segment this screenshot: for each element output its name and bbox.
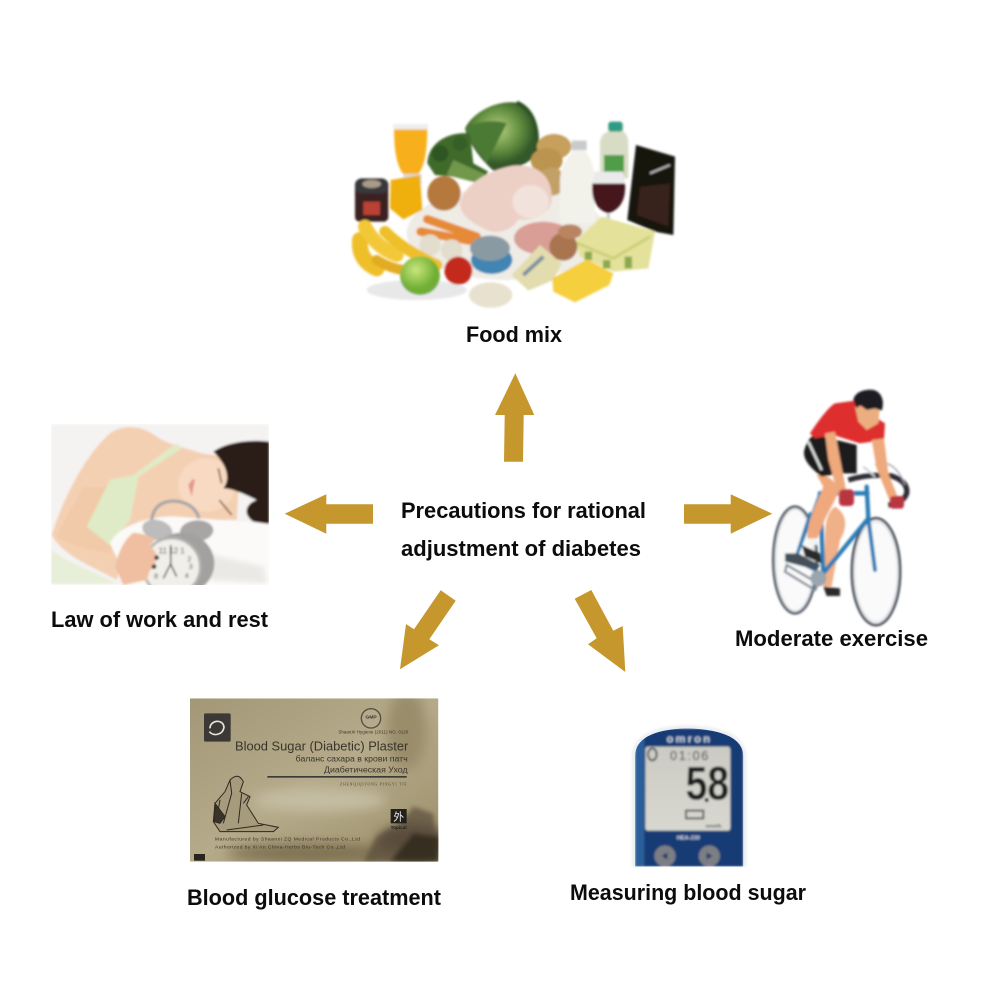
front wheel (852, 518, 900, 625)
yellow cheese (552, 259, 613, 302)
blue cheese (512, 245, 562, 291)
label: Moderate exercise: Moderate exercise (735, 626, 928, 651)
shadow (367, 280, 467, 300)
sleeping woman photo (51, 424, 270, 595)
saddle and handlebar (848, 463, 907, 505)
face (855, 405, 880, 430)
hair (853, 390, 883, 411)
black bag (627, 145, 675, 235)
glucose meter (632, 725, 747, 867)
far leg (823, 507, 845, 587)
stamp (361, 709, 381, 728)
approval number: ShaanXi Hygiene (2011) NO. 0120 (338, 729, 409, 734)
left button (654, 845, 676, 867)
rear wheel (773, 507, 817, 613)
wine glass (592, 172, 625, 222)
yogurts (575, 217, 655, 272)
mushrooms (419, 234, 462, 261)
ink mountains (363, 807, 438, 862)
milk bottle (560, 141, 595, 223)
right button (699, 845, 720, 867)
label: Food mix: Food mix (466, 322, 563, 347)
russian line 1: баланс сахара в крови патч (296, 754, 408, 764)
bike frame (795, 487, 875, 575)
rice (469, 282, 512, 308)
alarm clock (140, 501, 214, 595)
label: Law of work and rest: Law of work and rest (51, 607, 269, 632)
manufacturer text (215, 837, 360, 850)
cyclist illustration (773, 390, 907, 625)
alarm clock: 8 (154, 572, 158, 581)
arm far (872, 438, 898, 502)
food photo (355, 102, 675, 308)
center heading: Precautions for rational (401, 498, 646, 523)
tin (470, 236, 512, 274)
manufacturer text: Manufactured by Shaanxi ZQ Medical Products Co.,Ltd (215, 836, 360, 842)
carrots (421, 219, 477, 241)
sage drawing (213, 776, 278, 832)
stamp: GMP (365, 714, 377, 720)
alarm clock: 2 (187, 555, 191, 564)
bananas (360, 227, 437, 270)
body (635, 728, 743, 867)
cabbage (465, 102, 538, 171)
broccoli (427, 133, 488, 183)
tomato (444, 257, 472, 285)
russian line 2: Диабетическая Уход (324, 765, 408, 775)
time: 01:06 (670, 749, 708, 763)
alarm clock: 3 (189, 562, 193, 571)
center heading: adjustment of diabetes (401, 536, 641, 561)
corner block (194, 854, 205, 861)
arrow right (684, 494, 772, 534)
short stripe (808, 442, 822, 470)
closed eye and lips (218, 468, 232, 515)
plaster packet (190, 690, 450, 863)
arm near (825, 432, 847, 495)
topical badge: 外 (393, 812, 404, 824)
model: HEA-230 (677, 835, 700, 841)
product title: Blood Sugar (Diabetic) Plaster (235, 740, 408, 754)
label: Measuring blood sugar: Measuring blood sugar (570, 880, 806, 905)
potatoes (531, 134, 571, 196)
apple (400, 256, 440, 295)
jam jar (355, 178, 388, 222)
pedals and crank (785, 537, 840, 596)
alarm clock: 4 (185, 571, 189, 580)
shorts (804, 435, 857, 477)
oil bottle (600, 122, 628, 178)
manufacturer text: Authorized by Xi'An China-Herbs Bio-Tech Co.,Ltd (215, 845, 345, 851)
center heading (401, 498, 646, 561)
arrow up (495, 373, 534, 462)
topical badge (391, 809, 407, 830)
arm and shoulder (52, 427, 240, 580)
jersey (810, 401, 885, 443)
nails (152, 555, 159, 569)
meat (514, 222, 582, 261)
rule (267, 776, 407, 778)
arrow down-right (575, 590, 625, 672)
juice glass (393, 124, 428, 185)
reading: 58 (686, 757, 729, 810)
label: Blood glucose treatment: Blood glucose treatment (187, 885, 442, 910)
pillow (109, 515, 269, 558)
onion (427, 176, 461, 211)
yellow pepper (390, 175, 422, 219)
logo (204, 713, 231, 742)
screen (645, 747, 730, 831)
hair (213, 441, 269, 524)
base tint (407, 187, 607, 280)
near leg (807, 474, 838, 538)
chicken (460, 165, 552, 232)
green top (87, 443, 182, 545)
arrow left (285, 494, 373, 534)
unit: mmol/L (706, 823, 722, 828)
decimal point (705, 798, 709, 802)
ink wash (227, 690, 450, 863)
face (178, 458, 235, 512)
alarm clock: 11 12 1 (159, 546, 185, 555)
small clock icon (648, 748, 657, 760)
battery icon (686, 811, 703, 818)
pinyin line: ZHENQIQITONG PINGYI TIE (340, 782, 407, 786)
brand: omron (667, 734, 710, 746)
topical badge: Topical (391, 825, 407, 830)
gloves (839, 489, 904, 509)
hand (115, 533, 158, 585)
arrow down-left (400, 590, 456, 669)
